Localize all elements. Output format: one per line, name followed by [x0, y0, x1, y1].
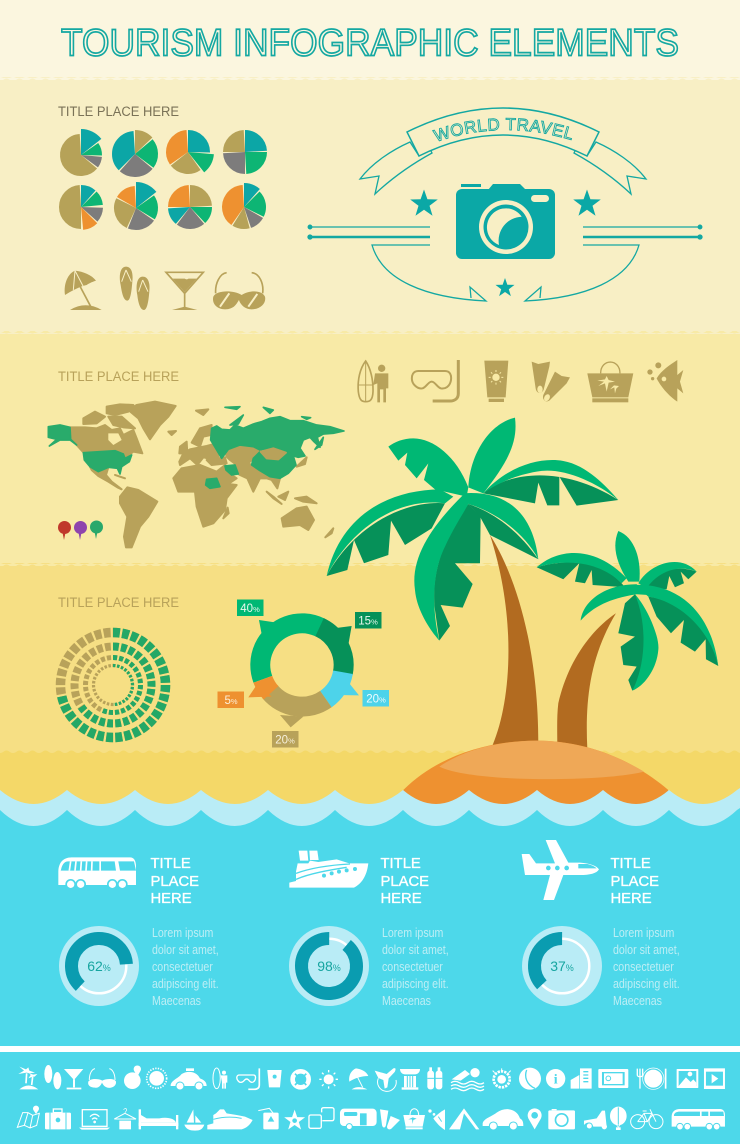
icon: bicycle [631, 1109, 663, 1129]
body text: Lorem ipsum [152, 926, 213, 940]
body text: adipiscing elit. [613, 977, 680, 991]
icon: palm island [18, 1067, 38, 1089]
right icons [375, 1067, 725, 1130]
body text: Maecenas [152, 994, 201, 1008]
label 20% khaki [272, 731, 298, 748]
icon: swim fins [532, 362, 570, 402]
star right [573, 190, 601, 216]
icon: fish [428, 1109, 445, 1130]
icon: bus [672, 1109, 725, 1130]
background bands [0, 0, 740, 823]
donut 62%: 62% [87, 958, 111, 974]
body text: Maecenas [382, 994, 431, 1008]
palm trees and island [327, 418, 718, 823]
body text: consectetuer [382, 960, 443, 974]
icon: camera [456, 184, 555, 259]
icon: balloon [610, 1107, 627, 1130]
heading: plane: HERE [610, 891, 652, 907]
icon: sunscreen [267, 1070, 282, 1087]
khaki beach icons [65, 267, 265, 310]
heading: ship: TITLE [380, 856, 421, 872]
heading: charts: TITLE PLACE HERE [58, 595, 179, 610]
donut 98%: 98% [317, 958, 341, 974]
icon: umbrella [349, 1068, 368, 1089]
icon: plane circle [375, 1068, 396, 1091]
pie 8 [228, 191, 260, 223]
icon: column [400, 1069, 420, 1090]
small palm fronds [537, 531, 718, 691]
ribbon text [436, 130, 578, 142]
pie 5 [65, 191, 97, 223]
icon: disco ball [493, 1068, 511, 1087]
icon: info: i [554, 1072, 558, 1087]
pie 1 [66, 140, 96, 170]
icon: fins [380, 1109, 400, 1129]
label 40%: 40% [240, 603, 260, 615]
map pins [58, 520, 103, 540]
label 40% [237, 600, 264, 616]
heading: bus: TITLE [150, 856, 191, 872]
panel: world map [48, 360, 683, 547]
heading: pies: TITLE PLACE HERE [58, 104, 179, 119]
heading: ship: PLACE [380, 874, 429, 890]
icon: laptop [79, 1110, 110, 1130]
body text: adipiscing elit. [382, 977, 449, 991]
icon: surfer [213, 1068, 227, 1089]
icon: beach bag [587, 362, 633, 402]
icon: snorkel mask [412, 360, 458, 401]
icon: sunglasses [88, 1069, 116, 1088]
pie 3 [173, 137, 203, 167]
icon: map [17, 1106, 39, 1128]
icon: bus [58, 857, 136, 890]
icon: surfer [358, 361, 388, 402]
left lines and arrow [308, 225, 486, 301]
icon: cards [258, 1108, 279, 1129]
world map [48, 402, 344, 547]
pie charts [65, 137, 260, 223]
heading: bus: PLACE [150, 874, 199, 890]
pie 4 [234, 141, 256, 163]
icon: tent [449, 1108, 479, 1129]
donut 98% [289, 926, 369, 1006]
icon: fish and bubbles [647, 360, 683, 402]
emblem: world travel camera: WORLD TRAVEL [432, 118, 572, 142]
icon: airplane [522, 840, 599, 900]
body text: dolor sit amet, [152, 943, 219, 957]
icon: caravan [340, 1109, 377, 1130]
icon: martini [64, 1069, 83, 1089]
water waves [0, 788, 740, 1050]
icon: safe [598, 1069, 628, 1088]
icon strip [0, 1046, 740, 1131]
icon: star [284, 1110, 305, 1130]
icon: sunglasses [213, 273, 265, 309]
emblem: world travel camera [307, 107, 703, 302]
concentric block rings [60, 632, 166, 738]
body text: dolor sit amet, [382, 943, 449, 957]
icon: film [704, 1068, 725, 1089]
heading: plane: TITLE [610, 856, 651, 872]
tree trunks [490, 535, 616, 748]
ribbon banner [360, 108, 646, 194]
body text: Lorem ipsum [613, 926, 674, 940]
right lines and arrow [525, 225, 702, 301]
icon: beach bag [403, 1109, 425, 1129]
label 20% blue [362, 690, 389, 706]
body text: dolor sit amet, [613, 943, 680, 957]
icon: swimmer [451, 1068, 484, 1091]
icon: dice [309, 1108, 334, 1128]
body text: Lorem ipsum [382, 926, 443, 940]
icon: flip flops [44, 1065, 61, 1089]
panel: pies and beach icons [58, 104, 265, 310]
icon: globe pin [124, 1065, 141, 1089]
label 5%: 5% [224, 695, 238, 707]
heading: plane: PLACE [610, 874, 659, 890]
body text: consectetuer [613, 960, 674, 974]
icon: beach umbrella [65, 271, 102, 310]
label 20% blue: 20% [366, 694, 386, 706]
icon: hanger [114, 1109, 136, 1129]
icon: sunscreen [484, 361, 508, 402]
icon: plate and cutlery [637, 1068, 666, 1089]
body text: adipiscing elit. [152, 977, 219, 991]
icon: sun [319, 1070, 338, 1089]
island [403, 741, 668, 823]
icon: scuba tanks [427, 1067, 442, 1089]
icon: bed [139, 1109, 178, 1129]
transport column: bus [58, 856, 219, 1008]
pie 2 [119, 138, 151, 170]
transport column: ship [289, 851, 449, 1008]
icon: taxi [171, 1068, 207, 1090]
icon: sun burst [147, 1068, 167, 1088]
icon: ship [207, 1109, 253, 1129]
label 15%: 15% [358, 616, 378, 628]
pie 7 [175, 192, 205, 222]
icon: picture [677, 1069, 698, 1088]
heading: map: TITLE PLACE HERE [58, 369, 179, 384]
transport column: plane [522, 840, 680, 1008]
label 20% khaki: 20% [275, 734, 295, 746]
icon: beach ball [519, 1068, 541, 1090]
icon: location pin [528, 1108, 542, 1129]
icon: sailboat [184, 1109, 204, 1131]
icon: cruise ship [289, 851, 368, 888]
icon: building [571, 1068, 592, 1089]
icon: snorkel [237, 1068, 259, 1089]
icon: martini glass [166, 272, 203, 310]
icon: camera [548, 1109, 575, 1129]
icon: suitcase [45, 1109, 71, 1129]
star left [410, 190, 438, 216]
heading: ship: HERE [380, 891, 422, 907]
left icons [17, 1065, 377, 1131]
icon: flip flops [120, 267, 150, 310]
khaki activity icons [358, 360, 683, 402]
heading: bus: HERE [150, 891, 192, 907]
title: TOURISM INFOGRAPHIC ELEMENTS [61, 22, 679, 64]
icon: info [546, 1069, 565, 1088]
big palm fronds [327, 418, 618, 641]
icon: scooter [584, 1111, 607, 1129]
donut 37% [522, 926, 602, 1006]
donut chart with pointers [243, 606, 361, 727]
body text: consectetuer [152, 960, 213, 974]
star bottom [495, 278, 515, 296]
pie 6 [121, 193, 151, 223]
label 15% [355, 612, 382, 628]
icon: car [483, 1109, 523, 1130]
icon: lifebuoy [293, 1071, 309, 1087]
label 5% [218, 692, 244, 708]
body text: Maecenas [613, 994, 662, 1008]
panel: circular charts [58, 595, 389, 748]
donut 37%: 37% [550, 958, 574, 974]
donut 62% [59, 926, 139, 1006]
